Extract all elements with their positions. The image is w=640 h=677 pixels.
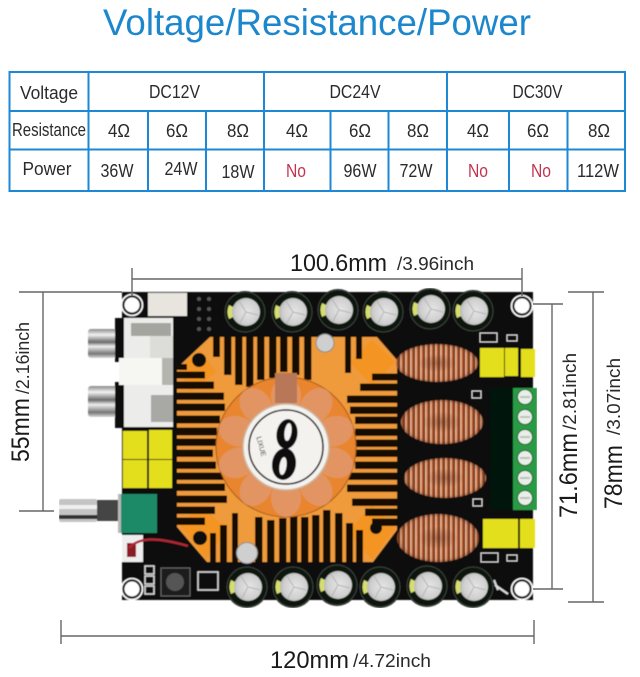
icon: standoffs: [236, 334, 334, 564]
row: voltage: DC12V: [149, 82, 200, 102]
panel: voltage resistance power table: [10, 72, 625, 191]
row: resistance: 6Ω: [166, 121, 188, 141]
bottom fins: [210, 510, 363, 562]
row: power: 72W: [400, 161, 433, 181]
row: power: 112W: [577, 161, 619, 181]
icon: RCA input jacks: [88, 318, 173, 428]
table grid: [10, 72, 625, 191]
icon: board silkscreen marks: [472, 333, 517, 562]
row: resistance: 4Ω: [467, 121, 489, 141]
top fins: [213, 337, 362, 387]
left fins: [177, 364, 227, 525]
row: power: [22, 159, 619, 182]
black corners of the heatsink: [192, 353, 206, 367]
row: resistance: 6Ω: [527, 121, 549, 141]
icon: bottom inductor and small parts: [145, 566, 508, 596]
row: resistance: 4Ω: [108, 121, 130, 141]
title: Voltage/Resistance/Power: [103, 2, 531, 43]
dimension: height 55mm: /2.16inch: [13, 322, 33, 394]
row: power: 36W: [100, 161, 134, 181]
icon: top capacitors: [224, 288, 494, 333]
row: power: No: [468, 161, 488, 181]
circuit board: [122, 292, 533, 600]
row: resistance: 8Ω: [227, 121, 249, 141]
dimension: height 71.6mm: [533, 304, 583, 589]
panel: amplifier board photo: [59, 288, 537, 608]
row: power: 18W: [222, 162, 255, 182]
fan logo: [254, 418, 299, 482]
dimension: height 78mm: 78mm: [600, 445, 628, 509]
icon: yellow capacitors left: [123, 430, 172, 488]
row: voltage: DC24V: [330, 82, 380, 102]
row: resistance: 8Ω: [588, 121, 610, 141]
dimension: height 78mm: [568, 292, 628, 602]
fan logo: LIXUE: [254, 436, 267, 458]
icon: green terminal block: [490, 388, 537, 510]
dimension: width 100.6mm: [132, 250, 522, 296]
dimension: length 120mm: [61, 620, 534, 674]
row: voltage: DC30V: [512, 82, 562, 102]
row: power: 24W: [164, 159, 198, 179]
row: resistance: 8Ω: [407, 121, 429, 141]
dimension: height 71.6mm: /2.81inch: [560, 353, 580, 430]
row: resistance: Resistance: [12, 120, 86, 140]
dimension: height 71.6mm: 71.6mm: [555, 433, 583, 518]
icon: toroid inductors: [396, 344, 486, 562]
dimension: width 100.6mm: /3.96inch: [397, 254, 474, 274]
row: resistance: 6Ω: [349, 121, 371, 141]
row: power: 96W: [344, 161, 377, 181]
icon: volume potentiometer: [59, 494, 157, 533]
icon: fan: [215, 373, 357, 517]
icon: power connector with red wires: [122, 535, 188, 562]
row: voltage: [20, 82, 562, 103]
right fins: [343, 374, 397, 526]
row: power: No: [531, 161, 551, 181]
row: power: No: [286, 161, 306, 181]
icon: bottom capacitors: [226, 564, 494, 608]
dimension: height 78mm: /3.07inch: [604, 358, 624, 435]
icon: yellow capacitors right: [480, 348, 535, 548]
dimension: height 55mm: [7, 292, 122, 511]
dimension: length 120mm: /4.72inch: [353, 651, 431, 671]
row: resistance: 4Ω: [286, 121, 308, 141]
row: power: Power: [22, 159, 72, 179]
icon: top connector and pin header: [148, 293, 211, 331]
row: resistance: [12, 120, 610, 141]
dimension: width 100.6mm: 100.6mm: [290, 250, 387, 277]
row: voltage: Voltage: [20, 83, 78, 103]
dimension: length 120mm: 120mm: [270, 647, 349, 674]
dimension: height 55mm: 55mm: [7, 398, 35, 462]
icon: mounting holes: [122, 294, 532, 600]
icon: heatsink: [177, 337, 397, 562]
